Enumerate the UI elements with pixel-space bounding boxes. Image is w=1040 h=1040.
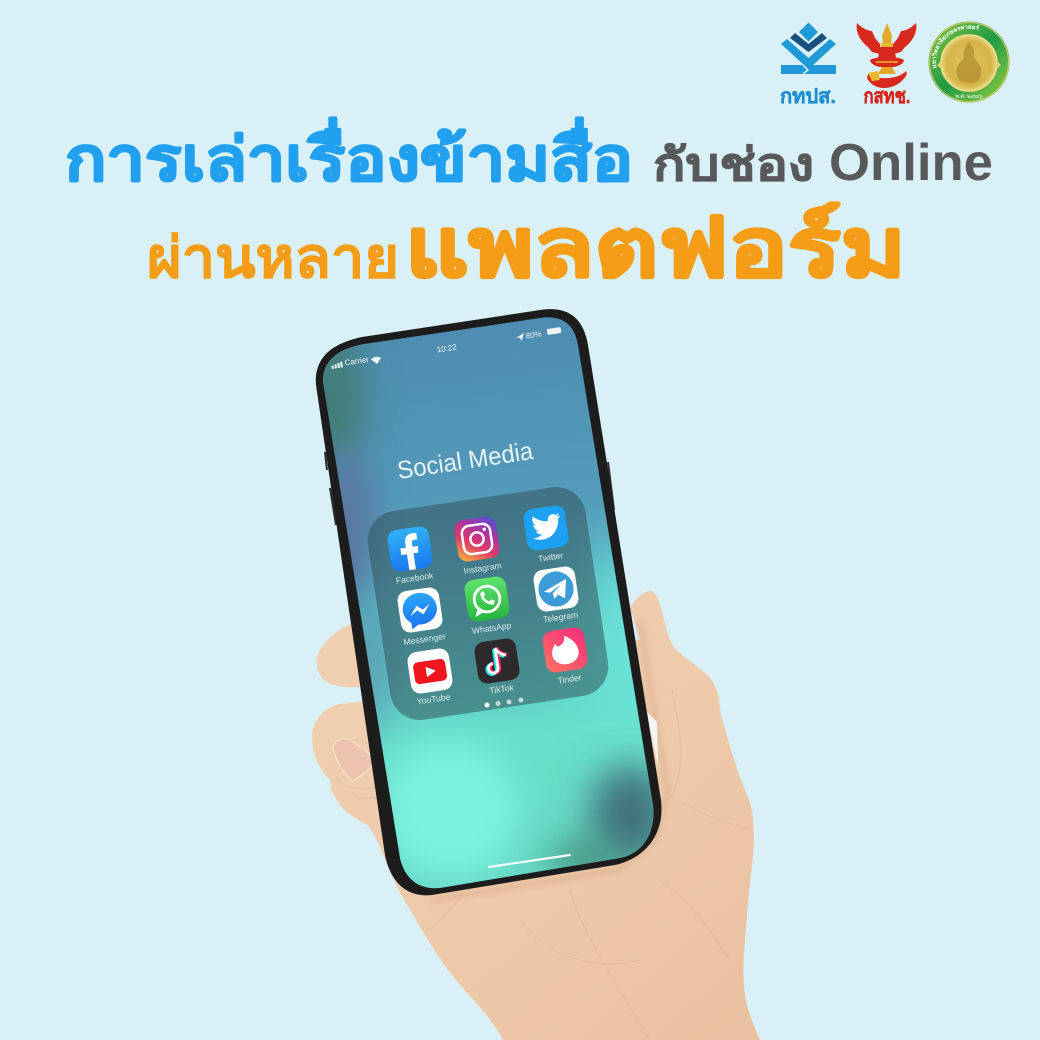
phone screen [322, 317, 654, 888]
app icons [386, 504, 589, 695]
heading: Social Media: Social Media [395, 437, 535, 485]
icon: Twitter [522, 504, 570, 552]
icon: WhatsApp [463, 575, 511, 623]
logo: NBTC fund [780, 22, 836, 108]
title line 1 [65, 117, 993, 193]
app labels: YouTube [416, 692, 451, 706]
app labels: Twitter [537, 550, 564, 564]
title line 2 [147, 202, 906, 294]
status bar [331, 327, 561, 369]
icon: Telegram [532, 565, 580, 613]
icon: Instagram [453, 515, 501, 563]
phone body [316, 309, 662, 895]
app labels: Instagram [463, 560, 502, 576]
app labels: TikTok [489, 682, 515, 696]
app labels: Facebook [395, 570, 435, 586]
side buttons [325, 452, 614, 525]
page dots [484, 698, 524, 708]
home indicator [489, 855, 570, 867]
app labels: Tinder [557, 672, 582, 686]
icon: Messenger [396, 586, 444, 634]
hand: palm and thumb [312, 591, 760, 1040]
hand: fingernail [333, 738, 375, 781]
title line 1: กับช่อง [653, 139, 814, 190]
icon: Facebook [386, 525, 434, 573]
hand: palm creases [336, 690, 752, 1040]
icon: Tinder [541, 626, 589, 674]
app labels: Telegram [542, 609, 579, 625]
app labels: Messenger [403, 631, 446, 647]
icon: YouTube [406, 647, 454, 695]
logo: NBTC fund: กทปส. [780, 86, 836, 108]
icon: TikTok [473, 637, 521, 685]
logo: university seal: พ.ศ. ๒๔๘๖ [955, 93, 983, 100]
app labels: WhatsApp [471, 620, 512, 636]
title line 1: Online [829, 134, 993, 192]
title line 1: การเล่าเรื่องข้ามสื่อ [65, 117, 633, 193]
status bar: Carrier [344, 355, 370, 367]
logo: university seal [928, 22, 1010, 102]
title [65, 117, 993, 294]
hand holding phone [312, 591, 760, 1040]
phone [316, 309, 662, 896]
status bar: 80% [525, 329, 542, 341]
app labels [395, 550, 582, 706]
hand: shadow under phone [430, 620, 668, 900]
title line 2: ผ่านหลาย [147, 226, 399, 289]
phone side highlight [647, 712, 658, 768]
title line 2: แพลตฟอร์ม [405, 202, 906, 294]
app folder [364, 483, 612, 724]
status bar: 10:22 [436, 343, 458, 354]
logo: university seal: มหาวิทยาลัยเกษตรศาสตร์ [932, 24, 980, 68]
logo: garuda: กสทช. [864, 86, 910, 108]
logos [780, 22, 1010, 108]
logo: garuda [857, 23, 916, 108]
